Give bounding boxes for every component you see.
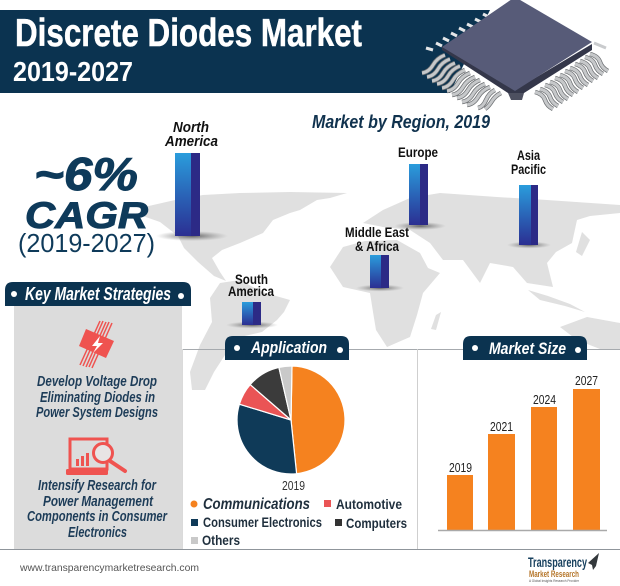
heading tab: application: Application — [250, 338, 327, 357]
heading tab: application — [225, 336, 349, 360]
bar: Asia Pacific: Asia — [517, 147, 540, 163]
text: strategy two: Components in Consumer — [27, 509, 168, 525]
title: Discrete Diodes Market — [15, 12, 362, 55]
legend: Computers — [346, 515, 407, 531]
icon: diode — [79, 321, 114, 368]
bar chart: 2027 — [575, 373, 598, 388]
bar: Asia Pacific: Pacific — [511, 161, 546, 177]
bar: South America — [226, 271, 278, 328]
pie year label: 2019 — [282, 478, 305, 493]
bar chart: 2021 — [490, 419, 513, 434]
pie chart — [237, 366, 345, 474]
panel: application — [190, 336, 407, 548]
text: strategy two: Intensify Research for — [38, 478, 157, 494]
text: strategy two — [27, 478, 168, 541]
text: strategy two: Electronics — [68, 525, 127, 541]
bar chart: 2019 — [449, 460, 472, 475]
panel frames — [0, 349, 620, 550]
bar: Europe: Europe — [398, 144, 438, 160]
panel: market size — [438, 336, 607, 530]
logo: A Global Insights Research Provider — [529, 579, 580, 583]
logo — [528, 553, 599, 583]
bar: Europe — [394, 144, 446, 230]
bar: South America: South — [235, 271, 268, 287]
bar: Asia Pacific — [507, 147, 551, 248]
bar chart — [438, 373, 607, 530]
icon: paper plane — [588, 553, 599, 570]
subtitle years: 2019-2027 — [13, 56, 133, 87]
legend: Communications — [203, 496, 310, 513]
heading tab: market size — [463, 336, 587, 360]
text: strategy one — [36, 374, 158, 421]
CAGR callout — [18, 148, 155, 258]
bar: North America: North — [173, 119, 209, 136]
icon: research laptop and magnifier — [66, 439, 125, 475]
CAGR callout: (2019-2027) — [18, 228, 155, 258]
bar chart: 2024 — [533, 392, 556, 407]
bar: Middle East and Africa: Middle East — [345, 224, 409, 240]
title banner — [0, 10, 490, 93]
panel: key market strategies — [5, 282, 191, 549]
legend: Others — [202, 532, 240, 548]
heading tab: key market strategies — [5, 282, 191, 306]
logo: Transparency — [528, 554, 587, 570]
bar: North America: America — [164, 133, 218, 150]
heading tab: key market strategies: Key Market Strategies — [25, 284, 171, 304]
bar: Middle East and Africa: & Africa — [355, 238, 399, 254]
footer website: www.transparencymarketresearch.com — [19, 562, 199, 574]
heading: market by region: Market by Region, 2019 — [312, 112, 490, 132]
text: strategy one: Eliminating Diodes in — [40, 390, 155, 406]
world map — [140, 192, 620, 390]
icon: microchip — [422, 0, 608, 109]
bar: Middle East and Africa — [345, 224, 409, 292]
text: strategy two: Power Management — [43, 494, 154, 510]
legend: Automotive — [336, 496, 402, 512]
text: strategy one: Power System Designs — [36, 405, 158, 421]
CAGR callout: ~6% — [34, 148, 138, 200]
logo: Market Research — [529, 569, 579, 579]
bar: South America: America — [228, 283, 274, 299]
text: strategy one: Develop Voltage Drop — [37, 374, 157, 390]
legend — [190, 496, 407, 548]
heading tab: market size: Market Size — [489, 339, 566, 358]
bar: North America — [156, 119, 228, 241]
legend: Consumer Electronics — [203, 514, 322, 530]
CAGR callout: CAGR — [25, 195, 148, 236]
